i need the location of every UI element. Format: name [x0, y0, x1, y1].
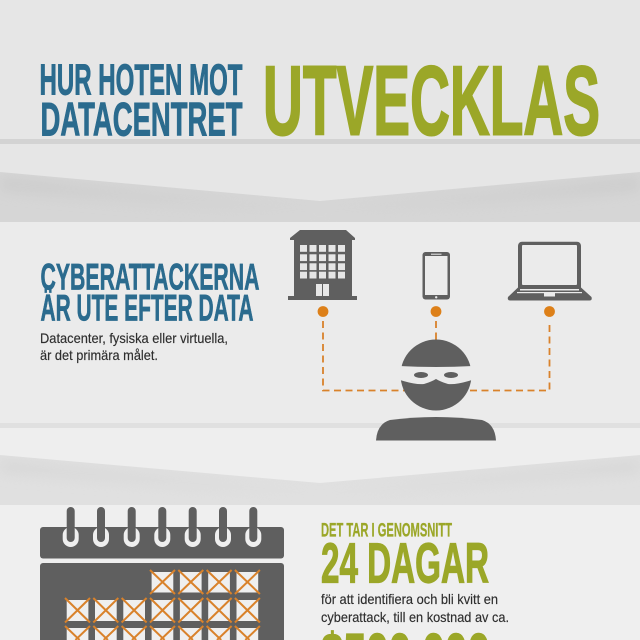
divider: section two rule — [0, 423, 640, 428]
calendar rings — [71, 511, 253, 539]
heading: cyberattackerna: ÄR UTE EFTER DATA — [40, 288, 254, 328]
heading: cyberattackerna: CYBERATTACKERNA — [40, 256, 260, 298]
icon: office building — [288, 230, 357, 300]
text: section three description: för att identifiera och bli kvitt en — [321, 591, 498, 607]
icon: laptop — [508, 242, 592, 300]
crossed-out days — [65, 570, 260, 640]
text: section three description — [321, 591, 509, 625]
text: section two description — [40, 330, 228, 363]
text: section three description: cyberattack, till en kostnad av ca. — [321, 609, 509, 625]
heading: cyberattackerna — [40, 256, 260, 328]
background: section three band — [0, 505, 640, 640]
icon: calendar — [40, 511, 284, 640]
text: section two description: Datacenter, fysiska eller virtuella, — [40, 330, 228, 346]
text: 24 dagar: 24 DAGAR — [321, 532, 489, 596]
chevron divider: bottom — [0, 450, 640, 505]
divider: header rule — [0, 139, 640, 144]
title: hur hoten mot datacentret — [40, 56, 243, 146]
background: header band — [0, 0, 640, 222]
title: hur hoten mot datacentret: DATACENTRET — [40, 92, 243, 146]
title: hur hoten mot datacentret: HUR HOTEN MOT — [40, 56, 243, 104]
connector dots and dashed lines — [318, 306, 555, 390]
text: section two description: är det primära målet. — [40, 347, 158, 363]
text: det tar i genomsnitt: DET TAR I GENOMSNITT — [321, 520, 452, 542]
background: section two band — [0, 222, 640, 505]
calendar body — [40, 563, 284, 640]
chevron divider: top — [0, 172, 640, 222]
icon: masked hacker — [376, 340, 496, 440]
background: lower part of section two — [0, 428, 640, 455]
icon: smartphone — [422, 252, 450, 300]
calendar header — [40, 527, 284, 558]
